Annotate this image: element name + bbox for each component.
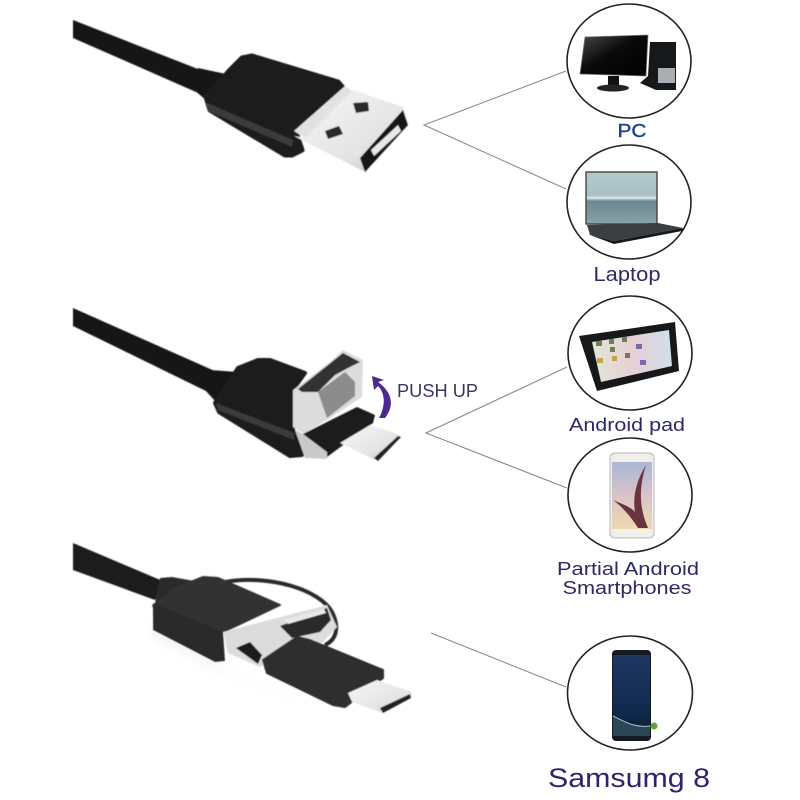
plug: Type-C adapter xyxy=(73,543,412,718)
label: Partial Android Smartphones: Smartphones xyxy=(562,578,692,598)
circle: Android pad xyxy=(568,296,692,410)
plug: push up micro USB xyxy=(73,308,401,461)
device: Samsung 8 xyxy=(568,636,692,750)
icon: white smartphone xyxy=(610,453,654,538)
label: PUSH UP: PUSH UP xyxy=(397,381,478,401)
device: partial Android smartphones xyxy=(568,438,692,552)
icon: monitor and tower xyxy=(580,35,676,92)
label: Samsumg 8: Samsumg 8 xyxy=(548,763,710,793)
circle: Samsung 8 xyxy=(568,636,692,750)
icon: tablet xyxy=(579,322,679,391)
connector line: Samsung 8 xyxy=(431,633,566,687)
device: laptop xyxy=(567,145,691,259)
label: Partial Android Smartphones xyxy=(557,559,699,598)
plug: USB-A with micro USB xyxy=(73,20,408,172)
label: Partial Android Smartphones: Partial Android xyxy=(557,559,699,579)
label: Laptop: Laptop xyxy=(594,264,660,286)
device: Android pad xyxy=(568,296,692,410)
circle: PC xyxy=(567,4,691,118)
circle: smartphones xyxy=(568,438,692,552)
icon: push up arrow xyxy=(372,376,391,418)
icon: dark smartphone xyxy=(612,650,658,741)
label: PC: PC xyxy=(618,121,646,141)
device: PC xyxy=(567,4,691,118)
label: Android pad: Android pad xyxy=(569,415,685,435)
circle: laptop xyxy=(567,145,691,259)
connector lines: Android pad and smartphones xyxy=(426,367,567,488)
icon: laptop xyxy=(586,172,683,244)
connector lines: PC and laptop xyxy=(424,71,566,189)
